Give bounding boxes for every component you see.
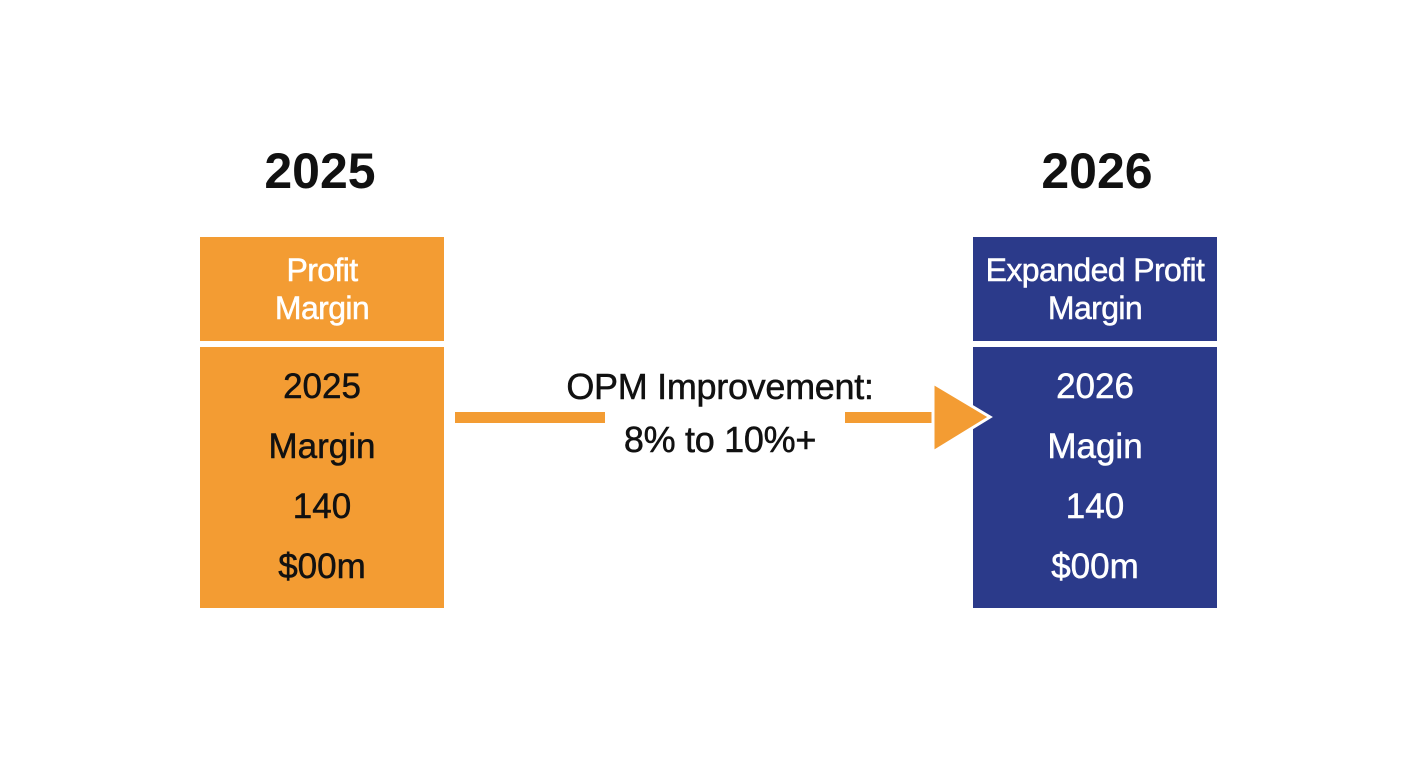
body: 2025 values: 2025 — [283, 367, 361, 406]
body: 2026 values: $00m — [1051, 547, 1139, 586]
body: 2026 values — [973, 347, 1217, 608]
body: 2026 values: Magin — [1047, 427, 1143, 466]
body: 2025 values: Margin — [268, 427, 375, 466]
body: 2026 values: 140 — [1066, 487, 1124, 526]
body: 2025 values: $00m — [278, 547, 366, 586]
label: OPM improvement: OPM Improvement: — [566, 366, 874, 407]
header: profit margin: Margin — [275, 290, 369, 326]
header: profit margin: Profit — [286, 252, 358, 288]
arrow — [455, 386, 993, 450]
label: OPM improvement: 8% to 10%+ — [624, 419, 816, 460]
header: expanded profit margin: Expanded Profit — [986, 252, 1204, 288]
body: 2025 values: 140 — [293, 487, 351, 526]
header: expanded profit margin: Margin — [1048, 290, 1142, 326]
year 2025: 2025 — [264, 143, 376, 199]
panel: 2026 expanded profit margin — [973, 237, 1217, 608]
year 2026: 2026 — [1041, 143, 1153, 199]
label: OPM improvement — [566, 366, 874, 460]
panel: 2025 profit margin — [200, 237, 444, 608]
header: expanded profit margin — [973, 237, 1217, 341]
header: profit margin — [200, 237, 444, 341]
body: 2026 values: 2026 — [1056, 367, 1134, 406]
body: 2025 values — [200, 347, 444, 608]
